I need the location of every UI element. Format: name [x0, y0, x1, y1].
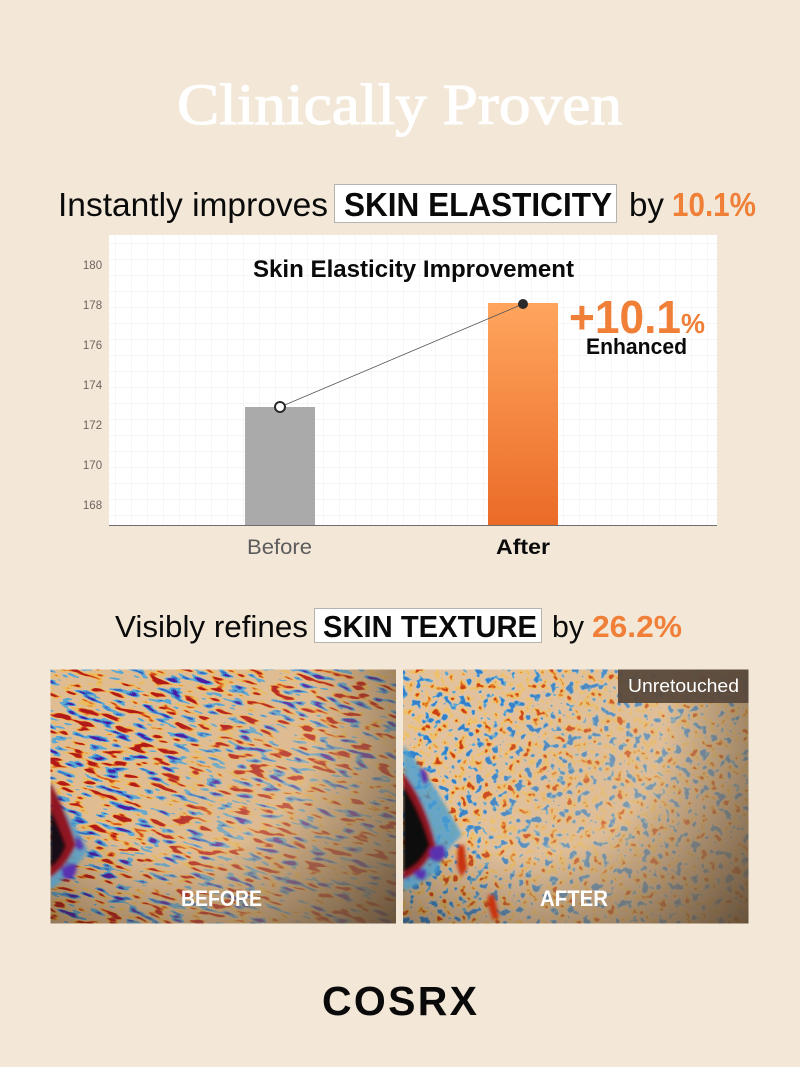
callout: +10.1% enhanced: Enhanced	[586, 334, 687, 359]
trend line with markers	[275, 299, 528, 412]
y axis labels: 178	[83, 300, 102, 312]
callout: +10.1% enhanced	[569, 291, 705, 359]
y axis labels: 170	[83, 460, 102, 472]
heading: skin texture: 26.2%	[592, 609, 682, 644]
dark eye region	[50, 782, 88, 890]
highlight: skin texture: SKIN TEXTURE	[323, 609, 537, 644]
y axis labels: 180	[83, 260, 102, 272]
callout: +10.1% enhanced: %	[681, 308, 705, 339]
y axis labels: 168	[83, 500, 102, 512]
heading: skin elasticity: 10.1%	[672, 186, 756, 223]
bar: after	[488, 303, 558, 525]
logo: COSRX: COSRX	[322, 978, 477, 1024]
x axis labels: Before	[247, 536, 312, 559]
label: after: AFTER	[540, 886, 608, 911]
dark eye region	[403, 745, 499, 920]
heading: skin texture	[115, 608, 682, 644]
x axis labels: After	[496, 536, 550, 559]
panel: elasticity bar chart	[83, 235, 717, 559]
photo: before skin scan	[50, 670, 396, 924]
y axis labels: 176	[83, 340, 102, 352]
heading: skin elasticity: Instantly improves	[58, 186, 328, 223]
x axis labels	[247, 536, 550, 559]
label: before: BEFORE	[181, 886, 262, 911]
axis line	[109, 524, 717, 526]
y axis labels	[83, 260, 103, 512]
unretouched tag	[618, 669, 749, 703]
y axis labels: 172	[83, 420, 102, 432]
title: Clinically Proven	[177, 72, 622, 137]
callout: +10.1% enhanced: +10.1	[569, 291, 681, 343]
chart title: Skin Elasticity Improvement	[253, 256, 574, 283]
bar: before	[245, 407, 315, 525]
y axis labels: 174	[83, 380, 103, 392]
photo: after skin scan	[403, 669, 749, 924]
highlight: skin elasticity: SKIN ELASTICITY	[344, 186, 612, 223]
heading: skin texture: by	[552, 609, 584, 644]
unretouched tag: Unretouched	[628, 675, 739, 696]
heading: skin texture: Visibly refines	[115, 609, 308, 644]
heading: skin elasticity	[58, 184, 756, 223]
heading: skin elasticity: by	[629, 186, 664, 223]
